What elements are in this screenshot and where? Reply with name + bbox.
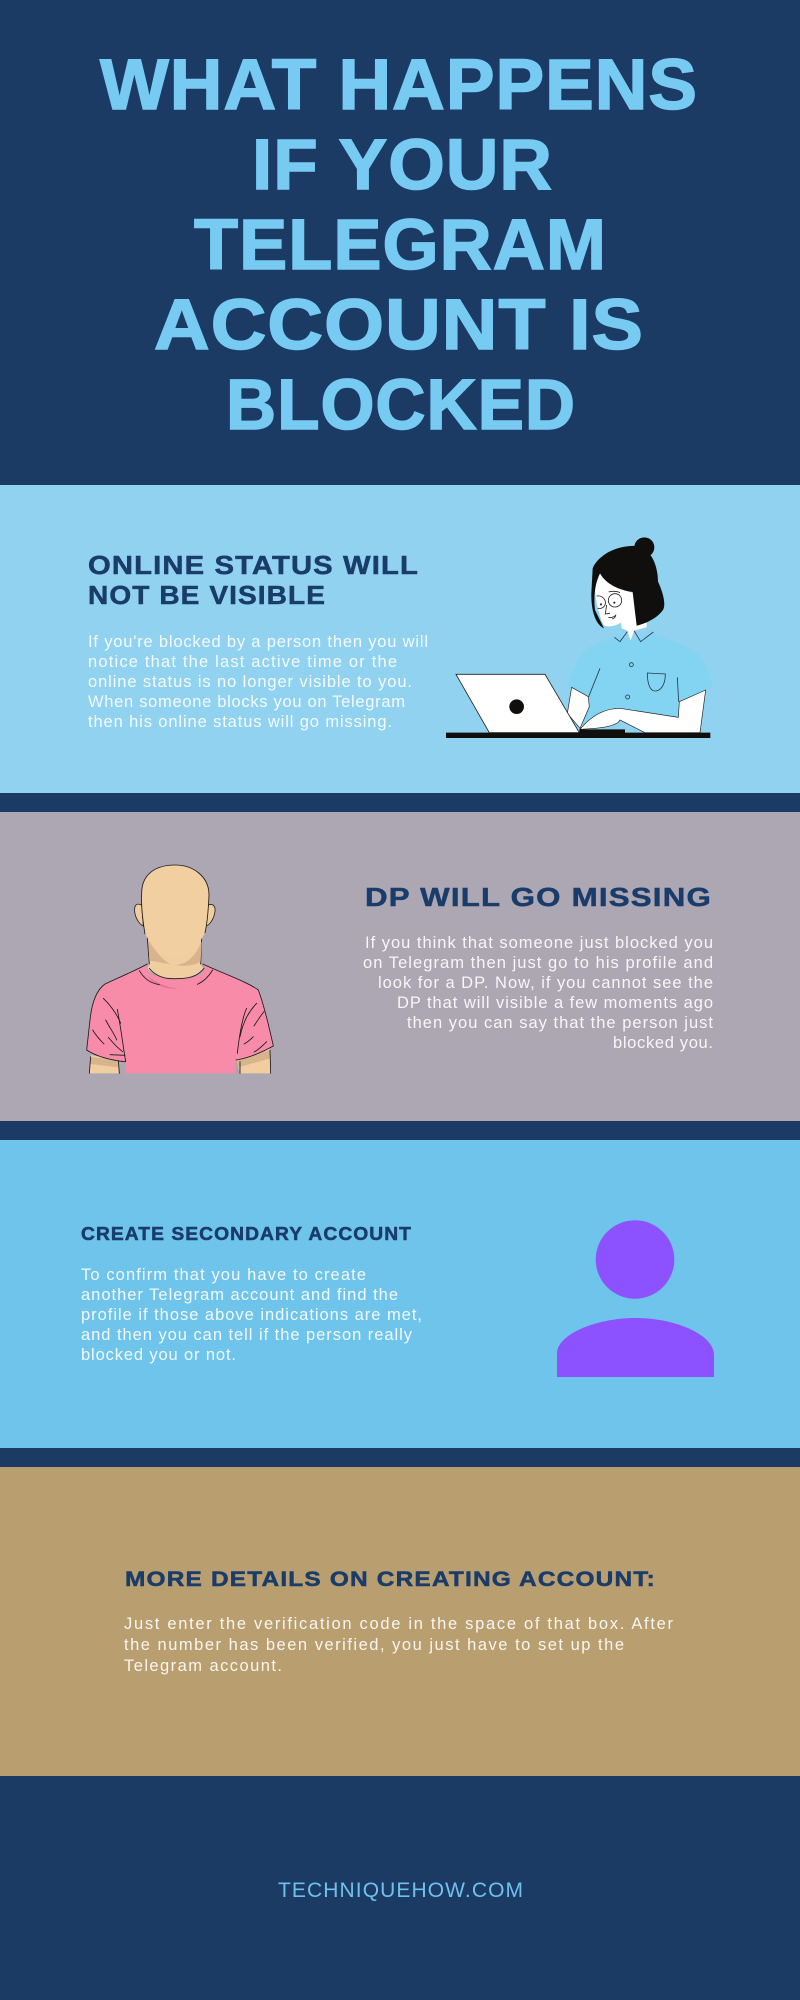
hair [591,537,664,628]
neck [147,937,203,978]
shirt [567,633,713,728]
text block: secondary account: and then you can tell if the person really [81,1326,413,1344]
ears [135,904,215,926]
table [446,729,710,738]
icon: user silhouette [557,1220,714,1377]
text block: more details: the number has been verified, you just have to set up the [124,1636,624,1654]
text block: dp missing: then you can say that the person just [407,1014,713,1032]
text block: secondary account: To confirm that you have to create [81,1266,366,1284]
text block: online status: online status is no longer visible to you. [88,673,412,691]
text block: secondary account: another Telegram account and find the [81,1286,398,1304]
heading: dp missing: DP WILL GO MISSING [365,882,712,912]
shirt details [589,631,679,702]
title [100,46,698,445]
title: ACCOUNT IS [154,286,644,365]
text block: online status: then his online status will go missing. [88,713,392,731]
heading: online status [88,550,419,610]
arms [89,1048,271,1073]
arms [567,687,706,733]
text block: more details [124,1615,674,1675]
text block: dp missing: on Telegram then just go to his profile and [363,954,713,972]
panel: dp missing [0,812,800,1121]
text block: more details: Just enter the verification code in the space of that box. After [124,1615,674,1633]
panel: secondary account [0,1140,800,1448]
text block: secondary account: blocked you or not. [81,1346,236,1364]
glasses and features [597,591,622,619]
tshirt [87,964,273,1073]
text block: dp missing: If you think that someone just blocked you [365,934,713,952]
text block: online status: notice that the last active time or the [88,653,397,671]
panel: online status [0,485,800,793]
heading: online status: NOT BE VISIBLE [88,580,326,610]
illustration: faceless man [87,865,273,1073]
text block: online status: If you're blocked by a person then you will [88,633,428,651]
face and neck [595,573,647,641]
heading: secondary account: CREATE SECONDARY ACCOUNT [81,1223,412,1244]
text block: secondary account [81,1266,422,1364]
text block: more details: Telegram account. [124,1657,282,1675]
head [142,865,209,958]
panel: more details [0,1467,800,1776]
text block: dp missing [363,934,713,1052]
title: TELEGRAM [194,206,607,285]
text block: online status [88,633,428,731]
laptop [456,674,579,733]
tshirt wrinkles [93,970,267,1062]
illustration: woman using laptop [446,537,713,738]
heading: online status: ONLINE STATUS WILL [88,550,419,580]
text block: online status: When someone blocks you on Telegram [88,693,405,711]
text block: dp missing: blocked you. [613,1034,713,1052]
title: BLOCKED [226,366,576,445]
title: IF YOUR [252,126,553,205]
title: WHAT HAPPENS [100,46,698,125]
text block: dp missing: DP that will visible a few moments ago [397,994,713,1012]
neck shadow [148,940,202,966]
text block: dp missing: look for a DP. Now, if you cannot see the [378,974,713,992]
footer: website: TECHNIQUEHOW.COM [278,1879,523,1902]
heading: more details: MORE DETAILS ON CREATING ACCOUNT: [125,1568,656,1591]
text block: secondary account: profile if those above indications are met, [81,1306,422,1324]
